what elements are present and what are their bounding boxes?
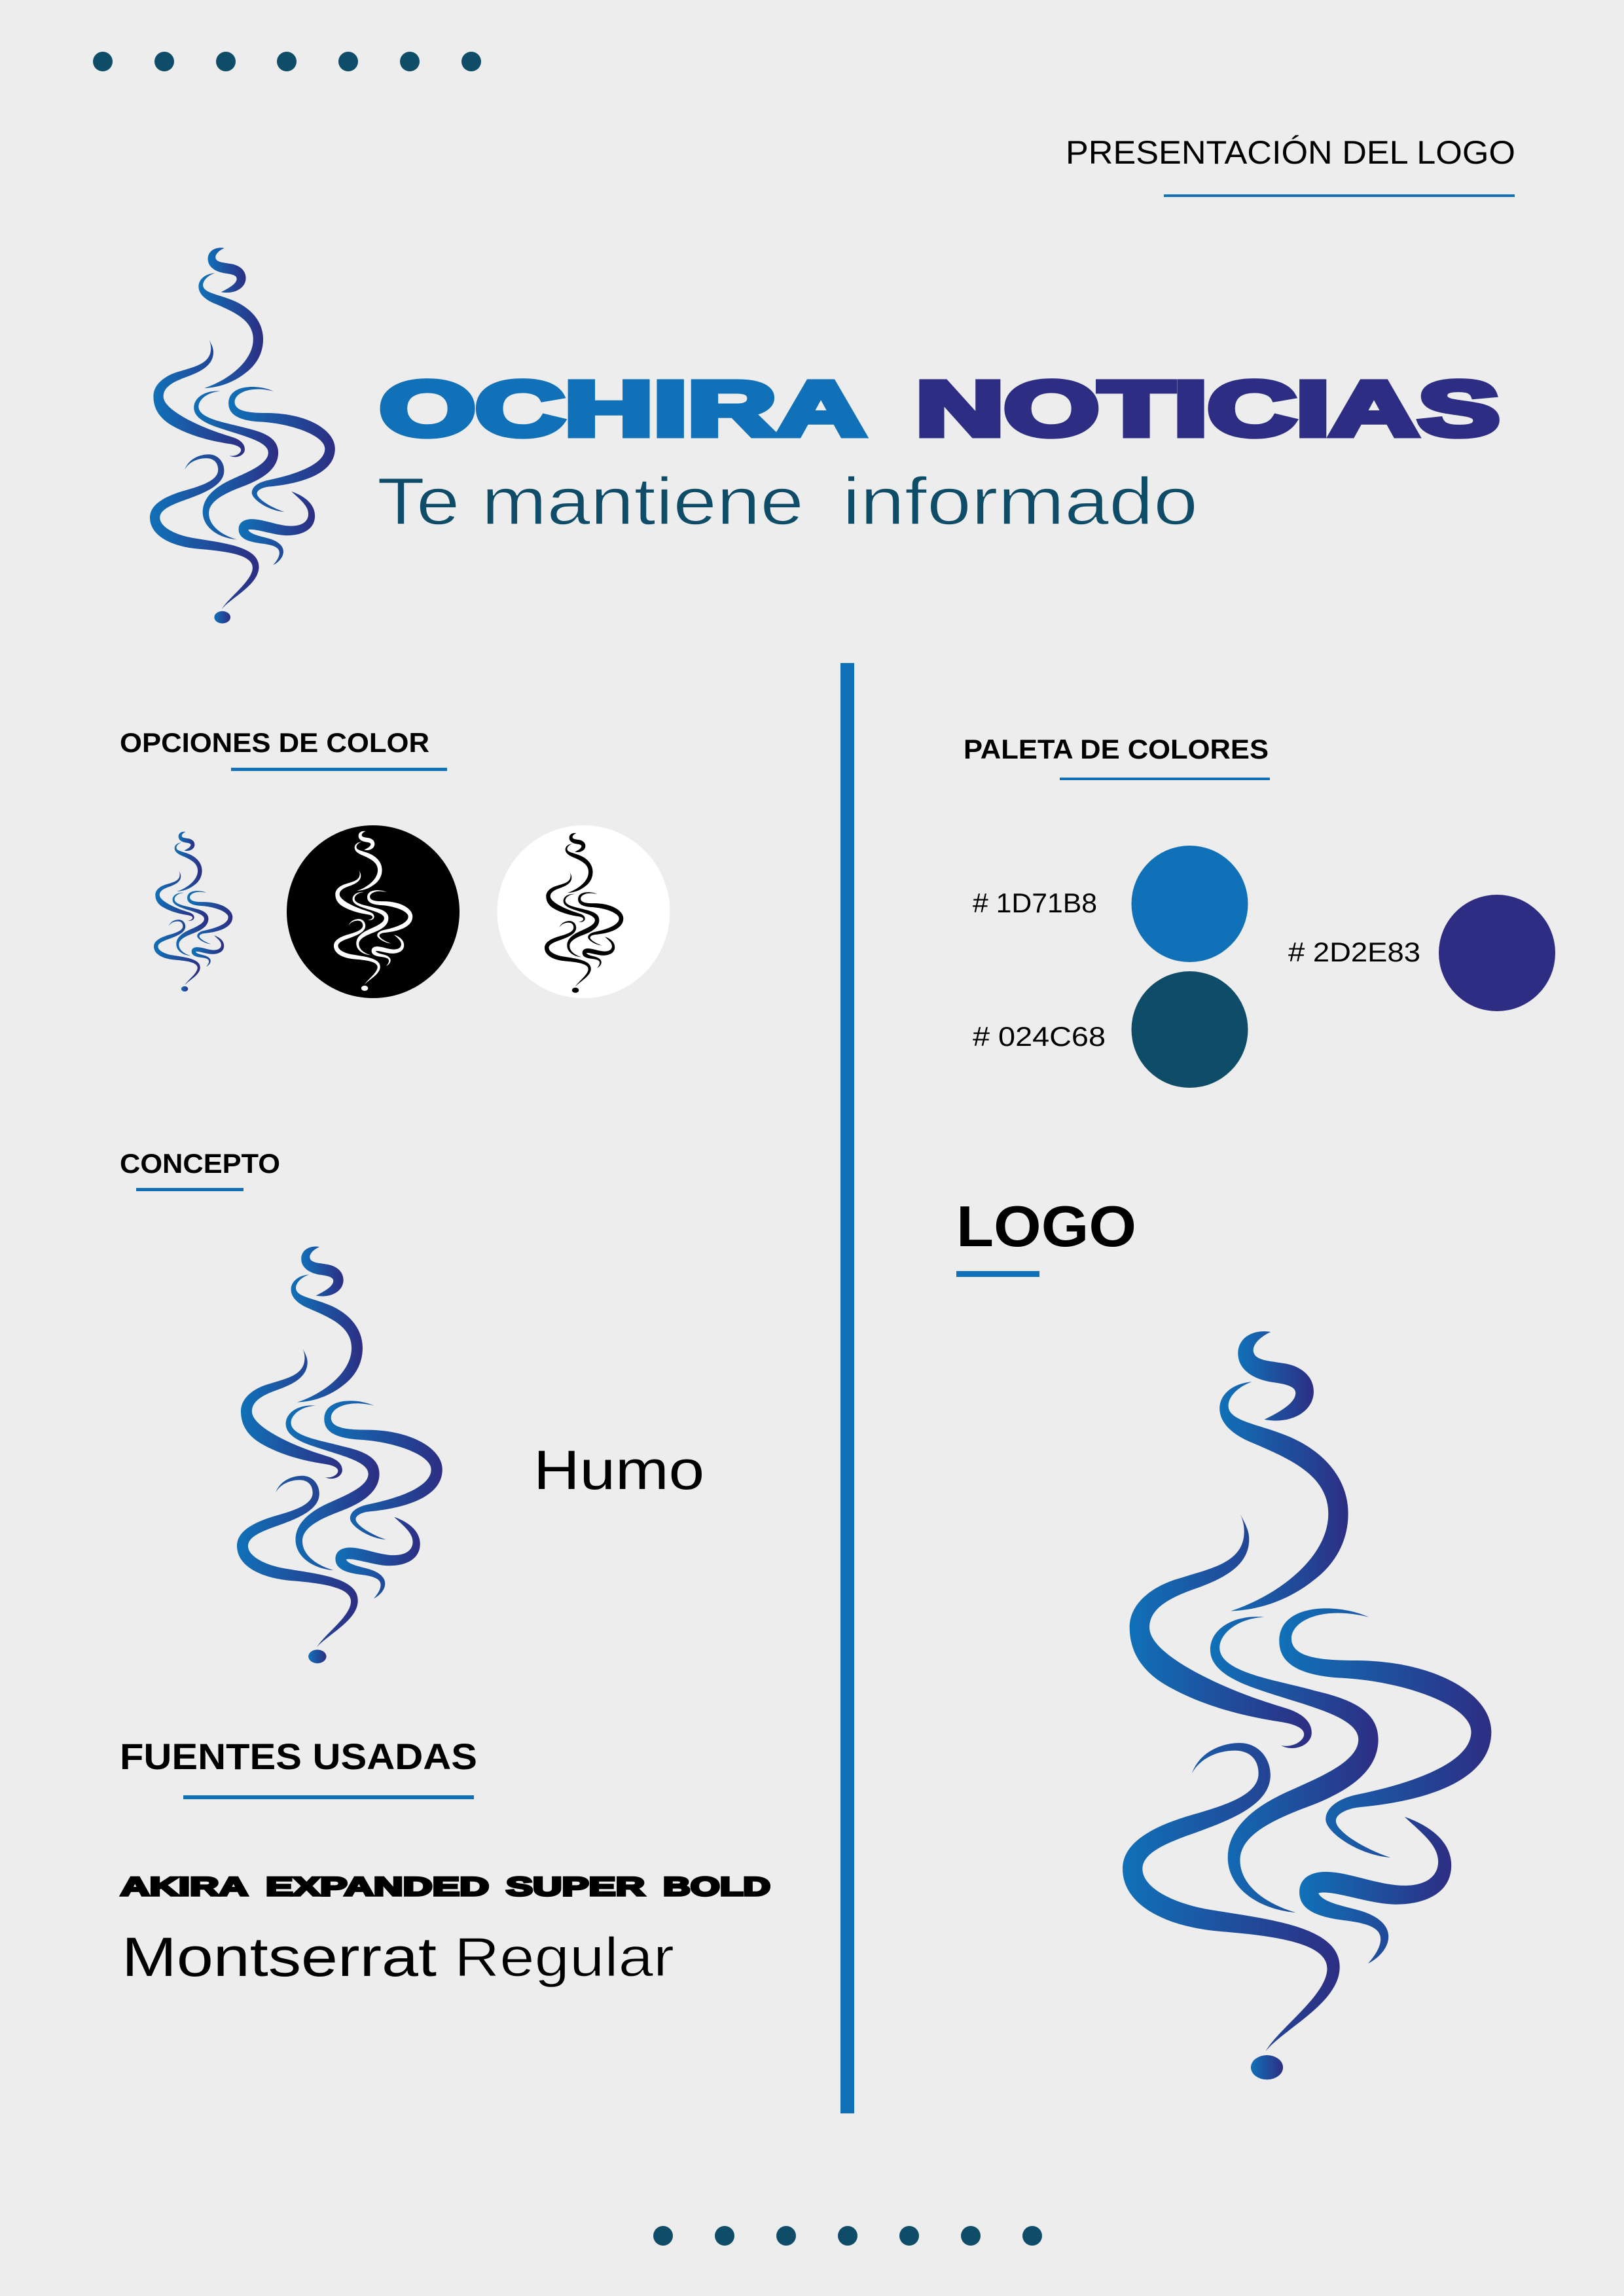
heading: opciones de color bbox=[120, 727, 447, 771]
heading: presentación del logo: PRESENTACIÓN DEL LOGO bbox=[1066, 134, 1515, 171]
bottom dots row bbox=[653, 2226, 1042, 2246]
heading: concepto: CONCEPTO bbox=[120, 1148, 280, 1179]
title: ochira noticias bbox=[380, 366, 1500, 452]
heading: fuentes usadas bbox=[120, 1736, 477, 1799]
font sample: montserrat: Montserrat bbox=[122, 1926, 437, 1988]
font sample: montserrat bbox=[122, 1926, 674, 1988]
swatch: 024C68 bbox=[973, 971, 1248, 1088]
font sample: akira: EXPANDED bbox=[266, 1873, 489, 1901]
swatch: 1D71B8: # 1D71B8 bbox=[973, 888, 1097, 918]
panel: opciones de color bbox=[120, 727, 670, 998]
font sample: akira: AKIRA bbox=[120, 1873, 248, 1901]
vertical divider bbox=[840, 663, 854, 2113]
panel: paleta de colores bbox=[964, 734, 1555, 1088]
swatch: 1D71B8 bbox=[973, 846, 1248, 962]
icon: white logo on black circle bbox=[287, 825, 460, 998]
heading: presentación del logo bbox=[1066, 134, 1515, 197]
swatch: 024C68: # 024C68 bbox=[973, 1021, 1106, 1052]
panel: logo bbox=[956, 1194, 1491, 2079]
icon: header smoke logo bbox=[150, 248, 335, 623]
panel: fuentes usadas bbox=[120, 1736, 770, 1988]
heading: fuentes usadas: FUENTES USADAS bbox=[120, 1736, 477, 1777]
heading: opciones de color: OPCIONES DE COLOR bbox=[120, 727, 429, 758]
font sample: akira: BOLD bbox=[663, 1873, 770, 1901]
heading: concepto bbox=[120, 1148, 280, 1191]
title: ochira noticias: NOTICIAS bbox=[916, 366, 1500, 452]
heading: paleta de colores bbox=[964, 734, 1270, 780]
icon: large smoke logo bbox=[1123, 1331, 1491, 2079]
icon: black logo on white circle bbox=[497, 825, 670, 998]
icon: concept smoke logo bbox=[237, 1247, 442, 1663]
heading: paleta de colores: PALETA DE COLORES bbox=[964, 734, 1269, 764]
label: humo: Humo bbox=[533, 1439, 704, 1501]
main logo lockup bbox=[150, 248, 1500, 623]
tagline: Te mantiene bbox=[377, 464, 804, 539]
icon: gradient logo option bbox=[154, 832, 232, 992]
swatch: 2D2E83: # 2D2E83 bbox=[1288, 937, 1420, 967]
font sample: akira bbox=[120, 1873, 770, 1901]
tagline: informado bbox=[842, 464, 1198, 539]
title: ochira noticias: OCHIRA bbox=[380, 366, 865, 452]
panel: concepto bbox=[120, 1148, 704, 1663]
swatch: 2D2E83 bbox=[1288, 895, 1555, 1011]
font sample: montserrat: Regular bbox=[454, 1926, 674, 1988]
top dots row bbox=[93, 52, 481, 71]
heading: logo: LOGO bbox=[956, 1194, 1136, 1259]
tagline bbox=[377, 464, 1198, 539]
font sample: akira: SUPER bbox=[506, 1873, 645, 1901]
